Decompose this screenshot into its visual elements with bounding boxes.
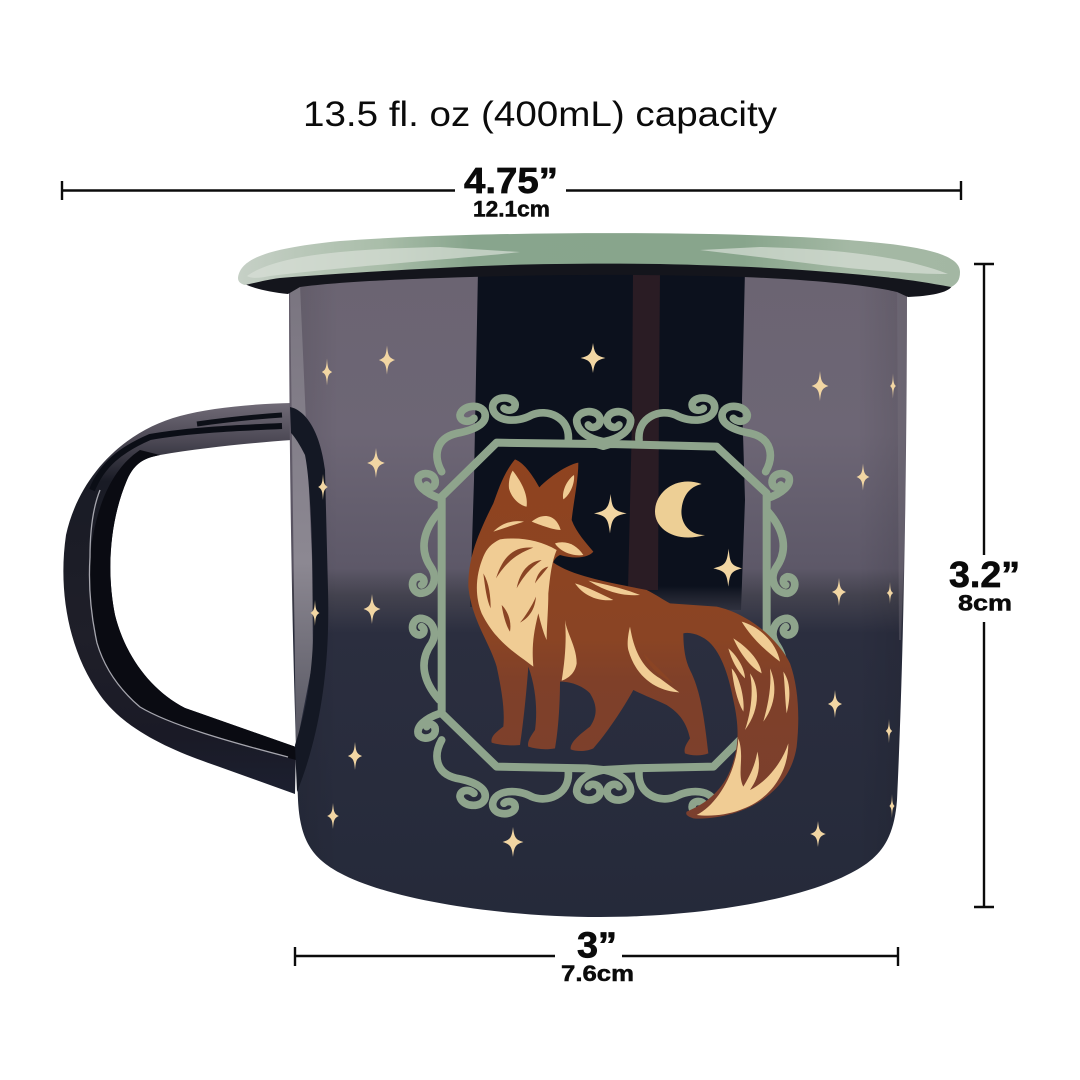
fox cream markings [477, 471, 789, 816]
emblem stars [594, 494, 742, 587]
capacity heading: 13.5 fl. oz (400mL) capacity [303, 94, 777, 134]
dimension: base width 3 inches [295, 924, 898, 986]
handle top stripes [89, 415, 288, 757]
dimension: rim width 4.75 inches: 4.75” [464, 160, 558, 201]
fox emblem [412, 398, 798, 819]
dimension: height 3.2 inches [949, 264, 1020, 907]
stars on mug [310, 343, 896, 857]
fox fur strokes [483, 547, 673, 683]
rim highlight [247, 247, 948, 278]
central dark reflection [470, 270, 745, 610]
brown streak reflection [628, 272, 660, 590]
ornate frame [412, 398, 795, 814]
dimension: rim width 4.75 inches: 12.1cm [473, 196, 550, 222]
dimension: height 3.2 inches: 8cm [958, 590, 1012, 616]
handle inner black band [89, 450, 296, 760]
rim underside shadow [245, 257, 952, 297]
fox body [468, 459, 798, 819]
mug body [289, 272, 907, 917]
handle [63, 403, 296, 794]
enamel rim [238, 233, 960, 287]
dimension: base width 3 inches: 7.6cm [561, 961, 634, 986]
dimension: rim width 4.75 inches [62, 160, 961, 222]
handle rivet plate [290, 407, 328, 792]
mug photo illustration [63, 233, 960, 917]
dimension: base width 3 inches: 3” [577, 924, 617, 966]
side highlights [290, 285, 313, 748]
side shading [289, 272, 907, 917]
dimension: height 3.2 inches: 3.2” [949, 554, 1020, 595]
crescent moon [655, 481, 705, 538]
